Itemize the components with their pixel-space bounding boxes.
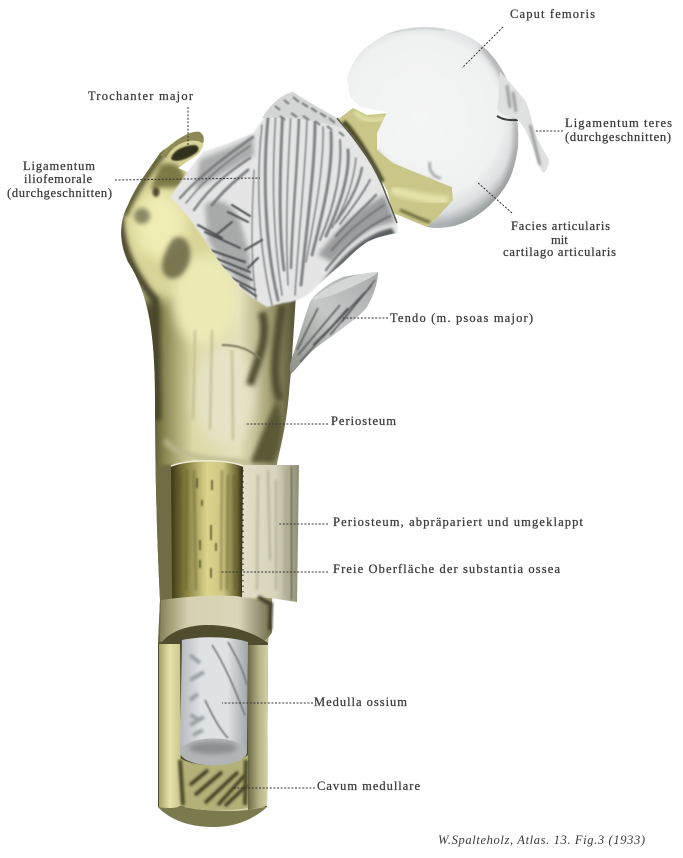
label: Facies articularis: mit [551, 233, 568, 247]
right cortical wall [248, 645, 268, 810]
shaded tissue areas [205, 201, 251, 290]
label: Ligamentum teres: (durchgeschnitten) [565, 130, 671, 144]
label: Tendo: Tendo (m. psoas major) [390, 311, 533, 325]
label: Ligamentum teres [565, 116, 672, 144]
left cortical wall [159, 644, 181, 808]
bottom rim [158, 806, 267, 827]
label: Ligamentum iliofemorale: (durchgeschnitten) [7, 186, 112, 200]
capsule outer rim with bumps [262, 92, 348, 130]
label: Facies articularis: Facies articularis [511, 219, 610, 233]
label: Ligamentum iliofemorale: Ligamentum [23, 159, 95, 173]
label: Medulla ossium: Medulla ossium [314, 695, 407, 709]
label: Trochanter major: Trochanter major [88, 89, 194, 103]
label: Ligamentum iliofemorale: iliofemorale [24, 172, 92, 186]
label: Ligamentum iliofemorale [7, 159, 112, 200]
label: Periosteum folded: Periosteum, abpräpariert und umgeklappt [333, 515, 584, 529]
label: Facies articularis: cartilago articularis [503, 245, 616, 259]
label: Ligamentum teres: Ligamentum teres [565, 116, 672, 130]
ligamentum teres [497, 72, 549, 173]
ligamentum iliofemorale capsule [170, 92, 398, 307]
periosteum ring [160, 596, 272, 642]
femoral neck [337, 108, 453, 227]
label: Facies articularis [503, 219, 616, 259]
label: Periosteum: Periosteum [331, 414, 396, 428]
cavity interior [180, 755, 248, 810]
leader lines [115, 27, 563, 788]
folded periosteum flap [242, 465, 299, 602]
label: Cavum medullare: Cavum medullare [317, 779, 420, 793]
label: Caput femoris: Caput femoris [510, 7, 595, 21]
femoral head [347, 27, 518, 228]
periosteum window: exposed bone surface [171, 461, 243, 600]
medulla ossium cylinder [180, 637, 248, 766]
femur illustration [115, 27, 549, 827]
medullary cavity [158, 625, 268, 827]
label: Freie Oberflaeche: Freie Oberfläche der substantia ossea [333, 562, 560, 576]
credit: W.Spalteholz, Atlas. 13. Fig.3 (1933) [438, 833, 645, 847]
femur shaft and trochanter [115, 130, 296, 827]
trochanter notch [171, 145, 199, 161]
tendon of psoas major [290, 272, 378, 374]
